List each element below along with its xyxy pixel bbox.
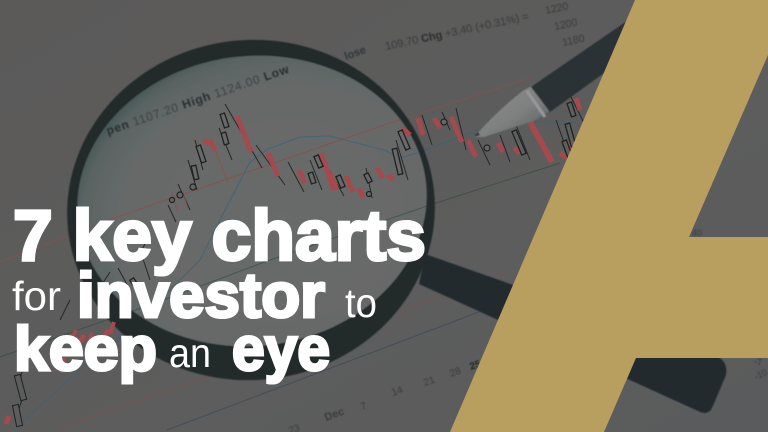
chart price and date labels: 1180 <box>561 32 586 49</box>
chart price and date labels: 7 <box>359 400 369 413</box>
title line 3: eye: eye <box>232 315 330 384</box>
title line 3: keep: keep <box>14 315 157 384</box>
title line 2: to: to <box>345 280 377 326</box>
chart price and date labels: 1220 <box>544 0 570 17</box>
chart lines seen through the lens <box>89 120 426 318</box>
chart price and date labels: pen 1107.20 High 1124.00 Low <box>104 62 291 138</box>
chart price and date labels: -7 <box>754 357 762 367</box>
candlestick chart <box>6 95 585 424</box>
chart price and date labels: 109.70 Chg +3.40 (+0.31%) = <box>384 11 530 53</box>
chart price and date labels: lose <box>343 44 368 63</box>
title <box>12 197 426 384</box>
chart price and date labels: 40 <box>692 228 702 238</box>
title line 2: investor: investor <box>77 261 325 331</box>
chart price and date labels: 14 <box>390 385 405 399</box>
gold logo shape <box>450 0 768 432</box>
chart price and date labels: 25 <box>468 359 483 373</box>
magnifying glass handle <box>419 254 726 413</box>
hollow dark candles <box>16 105 573 423</box>
chart price and date labels: Dec <box>323 406 346 424</box>
small circular candle markers <box>170 119 490 202</box>
title line 1: 7 key charts <box>13 197 426 276</box>
magnifying glass lens <box>50 22 452 398</box>
title line 3: an: an <box>169 330 211 376</box>
pen <box>474 12 650 137</box>
red candles <box>6 98 580 424</box>
chart price and date labels: 28 <box>448 366 463 380</box>
chart price and date labels: 21 <box>422 375 437 389</box>
chart price and date labels: 1200 <box>553 16 579 33</box>
thin wicks <box>15 95 585 420</box>
title line 2: for: for <box>12 273 61 319</box>
